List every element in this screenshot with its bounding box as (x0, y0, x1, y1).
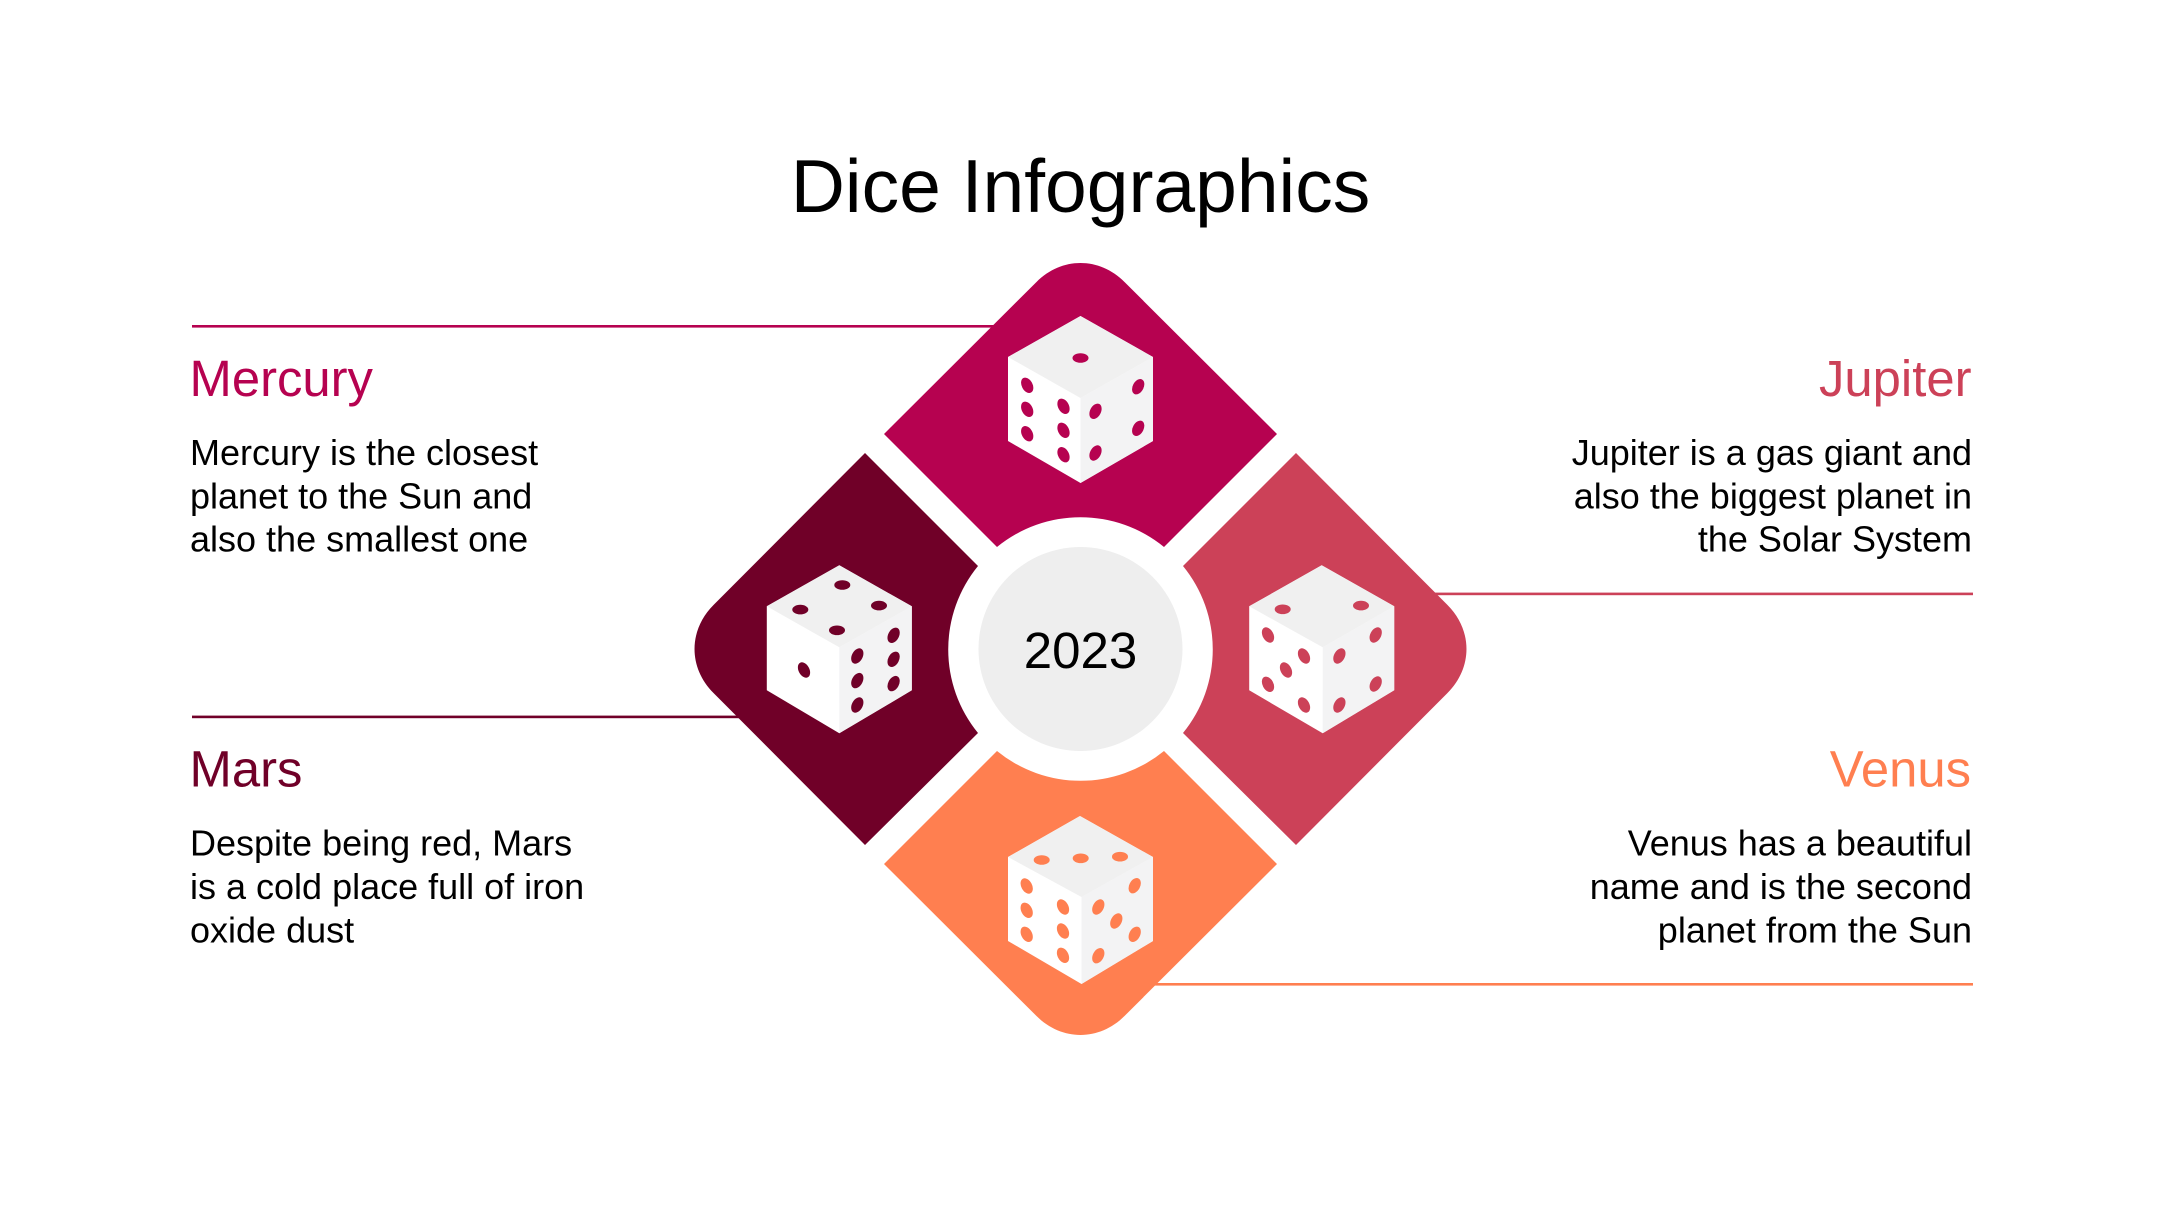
connector line: Mercury (192, 325, 1002, 328)
panel: Venus petal (884, 751, 1277, 1035)
center badge: 2023: 2023 (1024, 622, 1137, 679)
text block: Venus: Venus (1830, 741, 1971, 798)
icon: Mercury die (1008, 316, 1153, 483)
text block: Mercury: Mercury (190, 350, 374, 407)
text block: Jupiter: Jupiter (1819, 350, 1972, 407)
text block: Mercury: planet to the Sun and (190, 475, 532, 516)
connector line: Venus (1150, 983, 1973, 986)
title: Dice Infographics (791, 144, 1370, 228)
panel: Mercury petal (884, 263, 1277, 547)
text block: Mars: is a cold place full of iron (190, 866, 584, 907)
text block: Mercury: Mercury is the closest (190, 432, 538, 473)
text block: Jupiter: Jupiter is a gas giant and (1572, 432, 1972, 473)
text block: Jupiter: the Solar System (1698, 519, 1972, 560)
text block: Venus: Venus has a beautiful (1628, 823, 1972, 864)
icon: Mars die (767, 565, 912, 733)
text block: Mercury (190, 350, 538, 560)
panel: Mars petal (695, 453, 978, 845)
text block: Mars: Mars (190, 741, 302, 798)
connector line: Mars (192, 716, 747, 718)
text block: Venus (1590, 741, 1972, 950)
text block: Mars: oxide dust (190, 909, 354, 950)
text block: Mars: Despite being red, Mars (190, 823, 572, 864)
text block: Venus: planet from the Sun (1658, 909, 1972, 950)
center badge: 2023 (978, 547, 1182, 751)
icon: Jupiter die (1249, 565, 1394, 733)
text block: Jupiter: also the biggest planet in (1574, 475, 1972, 516)
text block: Mercury: also the smallest one (190, 519, 528, 560)
connector line: Jupiter (1430, 593, 1973, 595)
panel: Jupiter petal (1183, 453, 1466, 845)
text block: Jupiter (1572, 350, 1972, 560)
icon: Venus die (1008, 816, 1153, 984)
text block: Venus: name and is the second (1590, 866, 1972, 907)
text block: Mars (190, 741, 584, 950)
